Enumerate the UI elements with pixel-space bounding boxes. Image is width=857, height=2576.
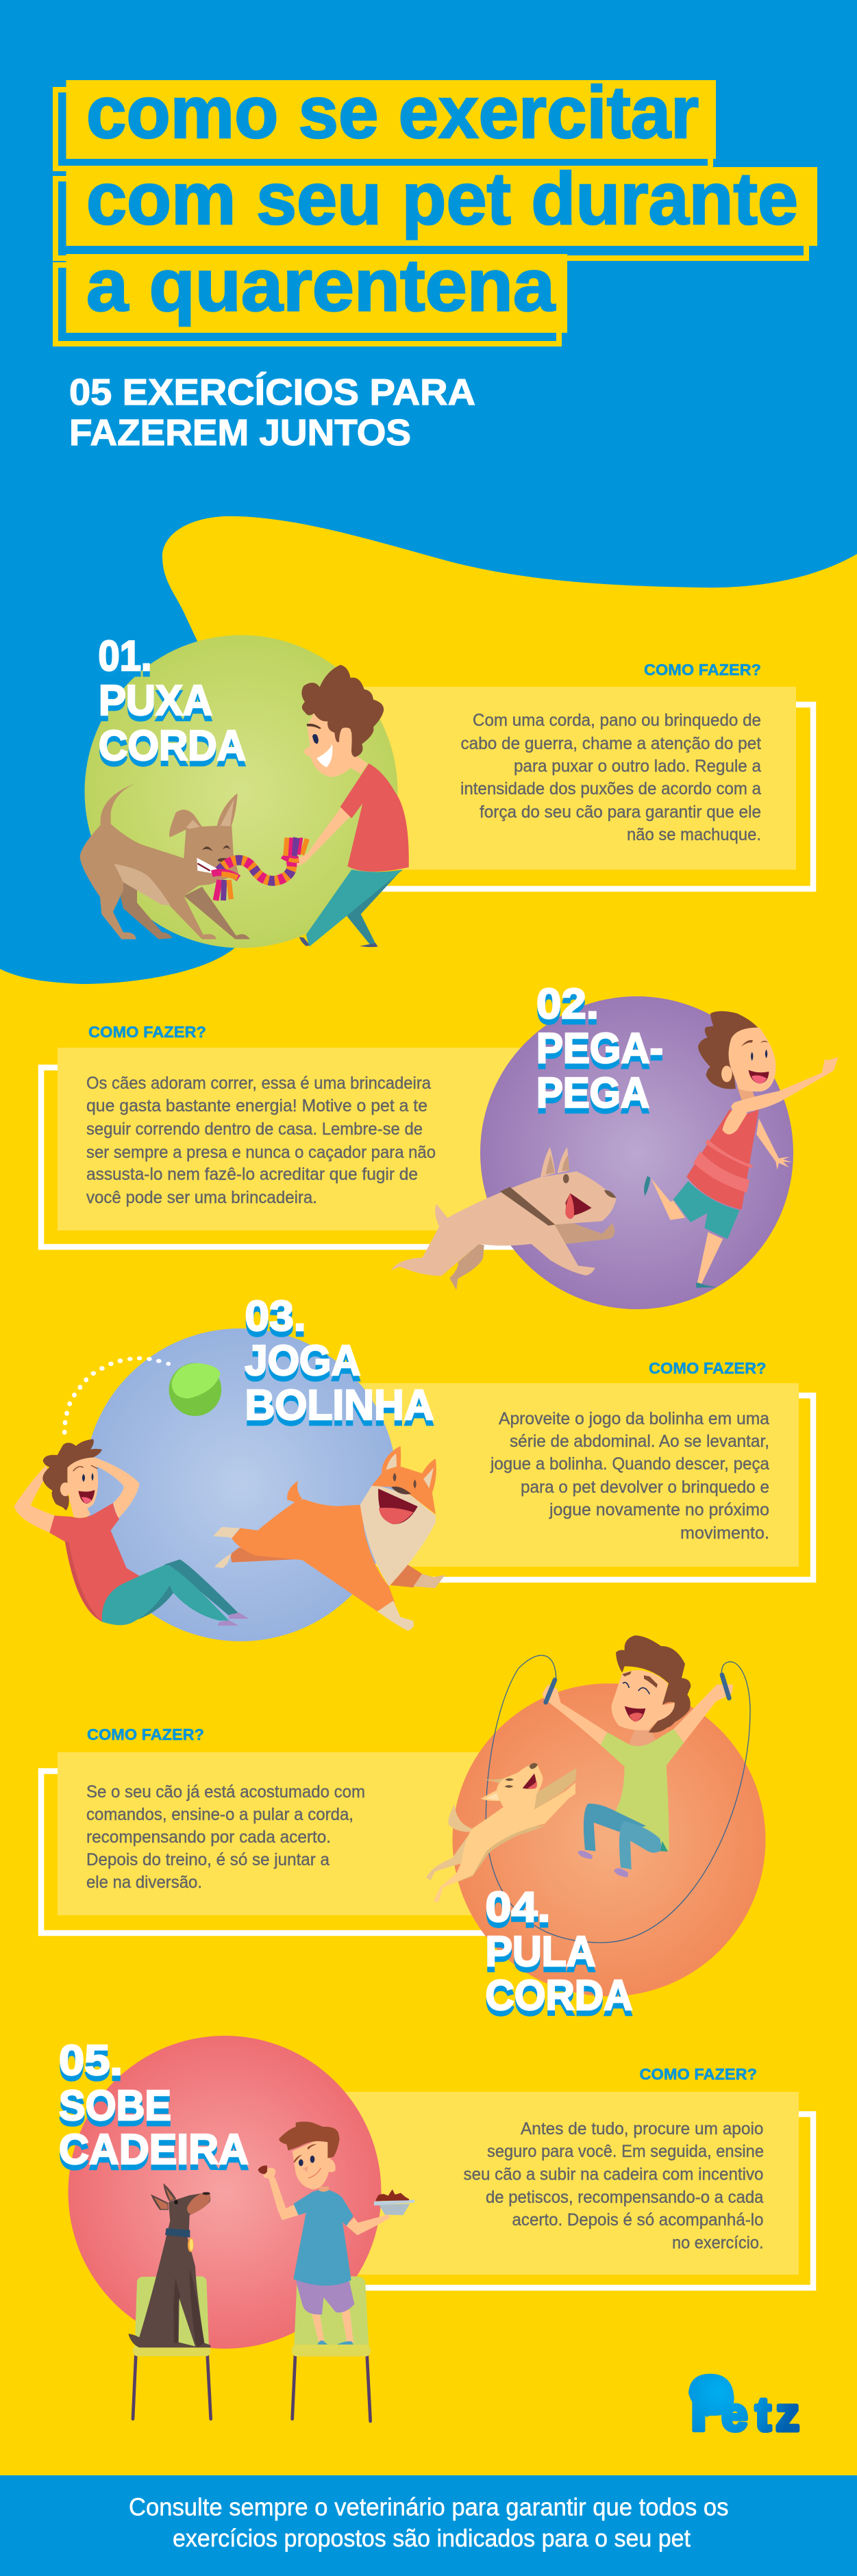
circle: purple (480, 996, 793, 1309)
boy smile (308, 2168, 321, 2178)
shirt shade (65, 1542, 102, 1621)
boy face (304, 703, 368, 777)
title block (55, 71, 817, 344)
shirt stripes (693, 1139, 753, 1193)
boy shirt (601, 1729, 684, 1851)
dog inner ears (186, 799, 234, 829)
right tassel magenta (290, 837, 291, 856)
illustration: boy and dog jumping rope (426, 1635, 750, 1943)
panel: exercise 2 text (41, 1023, 534, 1247)
logo wordmark: e (721, 2388, 747, 2440)
dog mouth (565, 1194, 592, 1217)
exercise title 02 (536, 981, 663, 1117)
treat in hand (258, 2166, 267, 2174)
subtitle: FAZEREM JUNTOS (69, 412, 411, 453)
left chair seat (133, 2345, 210, 2356)
title text line 2: com seu pet durante (86, 157, 798, 240)
corgi foot (377, 1601, 414, 1631)
rope handles (546, 1675, 729, 1702)
boy hair (698, 1011, 760, 1089)
exercise title 03: JOGA (245, 1337, 360, 1385)
exercise title 01 (99, 633, 246, 770)
dog nose (202, 2192, 210, 2195)
boy neck (69, 1498, 90, 1518)
boy neck (319, 2186, 329, 2193)
boy hair (301, 665, 384, 757)
text box 1 (343, 687, 796, 870)
title frame line 3 (55, 265, 559, 344)
exercise title 02: PEGA (536, 1070, 649, 1117)
dog belly (114, 864, 170, 905)
dog leg shading (173, 2269, 204, 2347)
dog inner ears (545, 1155, 569, 1174)
boy front shoe (696, 1283, 717, 1288)
logo wordmark: t (756, 2388, 771, 2440)
boy left arm (14, 1465, 54, 1532)
boy shoes (317, 2340, 353, 2345)
como fazer label 1: COMO FAZER? (644, 661, 761, 679)
dog eye (563, 1174, 569, 1183)
body text 2: que gasta bastante energia! Motive o pet a te (86, 1096, 427, 1115)
panel: exercise 1 text (343, 661, 813, 889)
boy back leg (347, 870, 402, 944)
rope purple twist (219, 858, 292, 881)
exercise title 01: PUXA (99, 677, 212, 724)
boy left arm (269, 2177, 299, 2220)
dog inner ear (486, 1793, 499, 1800)
boy right arm (346, 2214, 390, 2235)
dog mouth line (197, 863, 210, 871)
dog eyes (202, 846, 231, 851)
dog tag highlight (190, 2239, 193, 2251)
exercise title 05: CADEIRA (59, 2126, 249, 2173)
body text 4: ele na diversão. (86, 1873, 202, 1892)
boy left arm (549, 1703, 608, 1745)
boy front leg (619, 1821, 662, 1869)
exercise title 05: 05. (59, 2037, 123, 2084)
right tassel purple (293, 837, 297, 856)
text box 5 (329, 2092, 799, 2275)
boy hair (616, 1635, 691, 1732)
body text 3: para o pet devolver o brinquedo e (521, 1478, 769, 1497)
right knot (283, 855, 299, 859)
left chair back (135, 2276, 209, 2347)
dog far front leg (534, 1768, 577, 1810)
boy shoes (217, 1613, 249, 1626)
subtitle: 05 EXERCÍCIOS PARA (69, 372, 475, 413)
corgi upper paw (213, 1527, 240, 1539)
boy back leg (651, 1178, 685, 1220)
corgi tongue (379, 1508, 413, 1524)
exercise title 04: CORDA (485, 1972, 633, 2019)
boy arm (291, 807, 351, 866)
text box 3 (343, 1383, 799, 1567)
white frame 4 (41, 1771, 500, 1933)
bowl rim (374, 2200, 414, 2206)
body text 2: você pode ser uma brincadeira. (86, 1188, 317, 1207)
dog body shade (458, 1826, 546, 1882)
white frame 1 (343, 705, 813, 889)
illustration: boy and dog pulling rope (80, 665, 409, 947)
exercise title 03 (245, 1293, 434, 1429)
dog nose (218, 858, 230, 862)
boy brows (293, 2144, 317, 2162)
boy face (729, 1028, 775, 1091)
right tassel orange 2 (302, 839, 307, 855)
dog nose (529, 1763, 538, 1769)
exercise title 03: 03. (245, 1293, 306, 1340)
boy neck (629, 1726, 656, 1747)
jump rope (486, 1655, 750, 1943)
dog far ear (483, 1778, 505, 1783)
dog body (434, 1763, 575, 1902)
corgi mouth (378, 1489, 418, 1524)
body text 1: força do seu cão para garantir que ele (480, 803, 761, 822)
body text 3: série de abdominal. Ao se levantar, (510, 1432, 769, 1451)
exercise title 01: CORDA (99, 722, 246, 770)
boy mouth (625, 1706, 645, 1721)
dog tag (188, 2238, 194, 2252)
body text 3: jogue novamente no próximo (549, 1500, 769, 1519)
boy tongue (752, 1076, 767, 1084)
boy face (67, 1457, 98, 1510)
boy closed eyes (623, 1682, 649, 1694)
right tassel magenta 2 (299, 837, 301, 855)
body text 5: seu cão a subir na cadeira com incentivo (463, 2165, 763, 2184)
left knot orange (221, 874, 238, 878)
boy shirt (49, 1503, 140, 1621)
dog back legs (121, 882, 250, 939)
corgi nose (391, 1487, 411, 1494)
body text 5: seguro para você. Em seguida, ensine (487, 2142, 764, 2161)
body text 5 (463, 2119, 764, 2253)
footer text: Consulte sempre o veterinário para garantir que todos os (129, 2492, 729, 2521)
title frame line 2 (55, 179, 806, 258)
body text 5: no exercício. (672, 2234, 763, 2253)
boy shoes (299, 937, 378, 947)
dog inner ears (154, 2188, 174, 2209)
boy face (612, 1670, 675, 1730)
como fazer label 3: COMO FAZER? (649, 1359, 766, 1377)
boy right arm (673, 1684, 733, 1743)
body text 4: Se o seu cão já está acostumado com (86, 1782, 365, 1802)
rope magenta twist (219, 858, 292, 881)
corgi body (232, 1499, 395, 1611)
boy shorts (673, 1181, 740, 1239)
body text 3: movimento. (680, 1524, 769, 1543)
boy upper arm (722, 1109, 747, 1135)
body text 1: intensidade dos puxões de acordo com a (460, 779, 761, 798)
boy ear (340, 728, 352, 748)
boy shirt (686, 1109, 759, 1210)
boy mouth (78, 1490, 95, 1504)
boy legs (312, 2310, 353, 2343)
boy left hand (543, 1684, 560, 1704)
dog mouth (197, 858, 217, 873)
dog near ear (481, 1789, 500, 1801)
boy brows (741, 1040, 769, 1046)
left tassel orange (229, 880, 231, 899)
corgi tail (287, 1481, 302, 1502)
body text 4 (86, 1782, 365, 1892)
title bar line 1 (66, 80, 716, 159)
boy hand (262, 2168, 275, 2179)
panel: exercise 4 text (41, 1726, 503, 1933)
dotted ball path (62, 1356, 171, 1435)
boy second eye (310, 2156, 314, 2163)
gap between dog legs (179, 2299, 195, 2347)
boy neck (737, 1087, 755, 1100)
text box 2 (58, 1048, 530, 1230)
blue wave header background (0, 0, 857, 984)
como fazer label 5: COMO FAZER? (640, 2065, 757, 2083)
boy raised arm (731, 1057, 839, 1113)
circle: green (85, 635, 397, 948)
dog tongue (527, 1782, 537, 1789)
body text 5: acerto. Depois é só acompanhá-lo (512, 2210, 763, 2230)
white frame 5 (363, 2114, 813, 2288)
corgi back leg (230, 1548, 304, 1563)
circle: light blue (84, 1328, 397, 1641)
body text 3: Aproveite o jogo da bolinha em uma (499, 1409, 769, 1428)
body text 1: para puxar o outro lado. Regule a (514, 757, 761, 776)
exercise title 03: BOLINHA (245, 1382, 434, 1429)
logo wordmark: P (689, 2369, 735, 2446)
boy eye (312, 734, 319, 744)
corgi front far paw (413, 1574, 445, 1588)
boy mouth (749, 1070, 769, 1084)
exercise title 01: 01. (99, 633, 152, 680)
como fazer label 4: COMO FAZER? (87, 1726, 204, 1743)
footer text (129, 2492, 729, 2552)
white frame 2 (41, 1068, 534, 1247)
right chair seat (292, 2345, 371, 2356)
dog mouth (523, 1773, 536, 1789)
dog eyes (505, 1778, 514, 1788)
boy eyes (751, 1049, 767, 1061)
logo wordmark: z (776, 2388, 799, 2440)
boy hair (279, 2121, 340, 2158)
body text 4: comandos, ensine-o a pular a corda, (86, 1805, 353, 1824)
dog nose (604, 1190, 617, 1198)
body text 1: não se machuque. (627, 825, 761, 844)
body text 1: cabo de guerra, chame a atenção do pet (460, 734, 761, 753)
boy brows (622, 1671, 658, 1688)
corgi back paw (214, 1553, 232, 1568)
bowl (379, 2204, 410, 2215)
boy tongue (82, 1497, 92, 1503)
right chair back (294, 2276, 369, 2347)
title frame line 1 (55, 90, 710, 168)
exercise title 05: SOBE (59, 2082, 171, 2130)
left tassel (216, 880, 220, 900)
dog ears (151, 2183, 176, 2210)
boy ear (60, 1482, 71, 1496)
subtitle (69, 372, 475, 453)
dog harness (500, 1187, 555, 1226)
boy hair (42, 1439, 102, 1511)
dog eye (174, 2200, 178, 2204)
corgi head (371, 1446, 436, 1515)
boy shirt (340, 763, 409, 872)
boy back leg (138, 1559, 239, 1619)
boy shoes (577, 1851, 628, 1878)
body text 2 (86, 1074, 436, 1207)
dog muzzle (187, 2193, 210, 2214)
logo wordmark (689, 2369, 799, 2446)
exercise title 04 (485, 1884, 633, 2019)
boy smile (316, 744, 332, 768)
boy right arm (95, 1457, 140, 1519)
dog dark legs (449, 1223, 614, 1290)
exercise title 04: 04. (485, 1884, 551, 1931)
dog body (128, 2193, 210, 2347)
exercise title 04: PULA (485, 1928, 596, 1975)
boy eye (299, 2159, 303, 2166)
boy shorts (296, 2280, 354, 2314)
white frame 3 (411, 1396, 813, 1580)
dog body (391, 1172, 617, 1276)
boy eyebrow (307, 724, 321, 729)
left tassel purple (223, 880, 224, 900)
illustration: boy running with dog (391, 1011, 839, 1290)
body text 3: jogue a bolinha. Quando descer, peça (490, 1454, 769, 1474)
green ball (169, 1363, 221, 1416)
left knot (212, 872, 238, 879)
ball highlight (172, 1363, 220, 1398)
dog ears (169, 793, 238, 837)
right tassel orange (286, 837, 287, 856)
food in bowl (375, 2189, 409, 2201)
body text 5: Antes de tudo, procure um apoio (521, 2119, 763, 2138)
boy front leg (306, 870, 403, 946)
boy ear (721, 1065, 732, 1082)
boy back shoe (644, 1176, 650, 1196)
dog ears (541, 1147, 569, 1177)
panel: exercise 5 text (329, 2065, 813, 2288)
footer band (0, 2475, 857, 2576)
corgi eyes (393, 1473, 417, 1489)
dog tail (448, 1804, 473, 1832)
exercise title 02: 02. (536, 981, 599, 1028)
shorts accent (660, 1841, 668, 1852)
body text 2: assusta-lo nem fazê-lo acreditar que fugir de (86, 1165, 418, 1184)
panel: exercise 3 text (343, 1359, 813, 1580)
right knot orange (289, 859, 299, 861)
body text 1: Com uma corda, pano ou brinquedo de (473, 711, 761, 730)
text box 4 (58, 1752, 503, 1915)
body text 2: Os cães adoram correr, essa é uma brincadeira (86, 1074, 431, 1093)
body text 2: ser sempre a presa e nunca o caçador para não (86, 1143, 436, 1162)
circle: red (69, 2036, 381, 2349)
logo bowl blob (688, 2374, 734, 2417)
boy back arm (756, 1118, 792, 1170)
right chair legs (293, 2354, 371, 2421)
left chair legs (133, 2354, 211, 2419)
body text 2: seguir correndo dentro de casa. Lembre-se de (86, 1120, 423, 1139)
body text 5: de petiscos, recompensando-o a cada (486, 2188, 764, 2207)
title bar line 3 (66, 254, 567, 333)
boy back leg (584, 1804, 646, 1851)
body text 3 (490, 1409, 769, 1543)
boy nose (303, 2166, 308, 2173)
footer text: exercícios propostos são indicados para o seu pet (173, 2524, 691, 2552)
illustration: boy sit-ups with corgi and ball (14, 1356, 445, 1631)
dog tail, body and front leg (80, 783, 238, 939)
boy brows (73, 1465, 98, 1471)
exercise title 02: PEGA- (536, 1025, 663, 1072)
boy front leg (697, 1232, 723, 1284)
boy front leg (102, 1565, 229, 1625)
dog tongue (565, 1194, 574, 1219)
dog collar (165, 2228, 190, 2238)
exercise title 05 (59, 2037, 249, 2173)
circle: orange (452, 1683, 766, 1997)
rope base (219, 858, 292, 881)
illustration: boy and dog on chairs (128, 2121, 414, 2421)
body text 4: Depois do treino, é só se juntar a (86, 1850, 330, 1869)
boy face (293, 2141, 336, 2189)
dog far hind leg (426, 1834, 469, 1880)
rope toy (212, 837, 307, 900)
title bar line 2 (66, 167, 817, 246)
boy shirt (293, 2190, 353, 2286)
corgi front far leg (390, 1565, 422, 1587)
body text 4: recompensando por cada acerto. (86, 1828, 331, 1847)
corgi inner ears (386, 1454, 434, 1488)
body text 1 (460, 711, 761, 844)
title text line 3: a quarentena (86, 244, 556, 326)
title text line 1: como se exercitar (86, 71, 699, 153)
boy tongue (629, 1713, 643, 1721)
logo: Petz (688, 2369, 799, 2446)
corgi chest (360, 1486, 436, 1587)
como fazer label 2: COMO FAZER? (88, 1023, 206, 1041)
boy eyes (82, 1473, 93, 1482)
